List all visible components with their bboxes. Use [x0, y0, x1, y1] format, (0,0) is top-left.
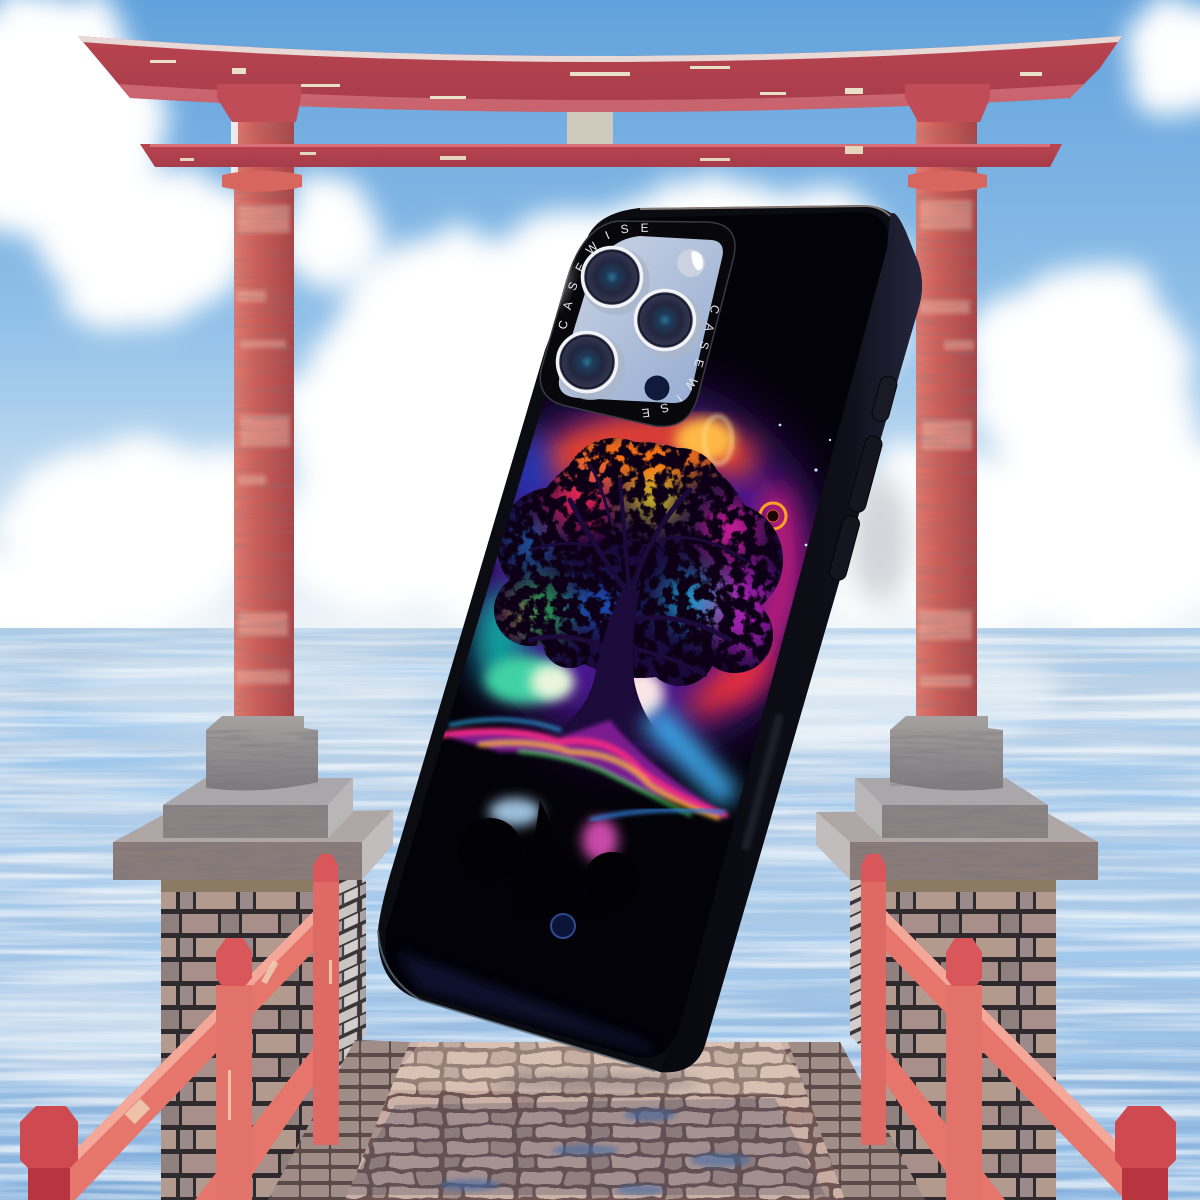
right railing	[861, 854, 1176, 1200]
cloud shadow behind phone	[850, 475, 910, 605]
brick pier	[850, 880, 1056, 1200]
side buttons	[828, 374, 899, 582]
sea	[0, 628, 1200, 1200]
centre strut	[567, 104, 613, 144]
nebula glow	[475, 395, 815, 745]
clouds	[0, 0, 1200, 650]
posts	[313, 880, 339, 1145]
reflected tree	[458, 798, 725, 938]
right kerb	[788, 1042, 925, 1200]
tree canopy foliage	[494, 438, 783, 686]
tree canopy colours	[494, 438, 783, 686]
lower beam	[140, 144, 1062, 167]
foreground finial	[28, 1165, 70, 1200]
left column cap	[217, 84, 301, 122]
left stone pedestal	[113, 716, 393, 1200]
stars	[778, 424, 832, 546]
slab	[113, 810, 393, 880]
glint	[544, 260, 576, 310]
column base	[890, 716, 1003, 790]
rails	[868, 895, 1145, 1200]
column base	[206, 716, 318, 790]
rails	[55, 895, 332, 1200]
lens bottom left	[557, 332, 625, 400]
bottom sheen	[395, 950, 660, 1055]
rainbow ground	[442, 720, 728, 818]
plinth	[855, 778, 1048, 838]
left kerb	[268, 1040, 410, 1200]
blue light beam	[640, 705, 740, 808]
brand text: lower right: CASEWISE	[642, 306, 719, 418]
sensor	[644, 376, 670, 400]
phone in case	[377, 205, 922, 1072]
right column cap	[905, 84, 990, 122]
plinth	[163, 778, 353, 838]
flash	[677, 249, 705, 277]
left column	[222, 100, 302, 720]
camera plateau	[559, 236, 723, 403]
brand text: upper left: CASEWISE	[558, 224, 648, 329]
case edge highlights	[640, 206, 890, 216]
case artwork: cosmic tree	[370, 200, 900, 1080]
lens right	[635, 290, 703, 358]
camera ring	[540, 220, 736, 428]
lens top left	[582, 247, 650, 315]
case body	[378, 205, 922, 1072]
side frame	[660, 213, 922, 1072]
stone walkway	[250, 1030, 930, 1200]
brick pier	[161, 880, 366, 1200]
posts	[861, 880, 886, 1145]
foreground finial	[1122, 1165, 1168, 1200]
right column	[908, 100, 987, 720]
trunk and branches	[530, 465, 745, 745]
left railing	[20, 854, 339, 1200]
torii gate	[78, 36, 1122, 720]
right stone pedestal	[816, 716, 1098, 1200]
slab	[816, 810, 1098, 880]
sky background	[0, 0, 1200, 630]
phone contact shadow	[500, 1072, 700, 1092]
top beam	[78, 36, 1122, 112]
